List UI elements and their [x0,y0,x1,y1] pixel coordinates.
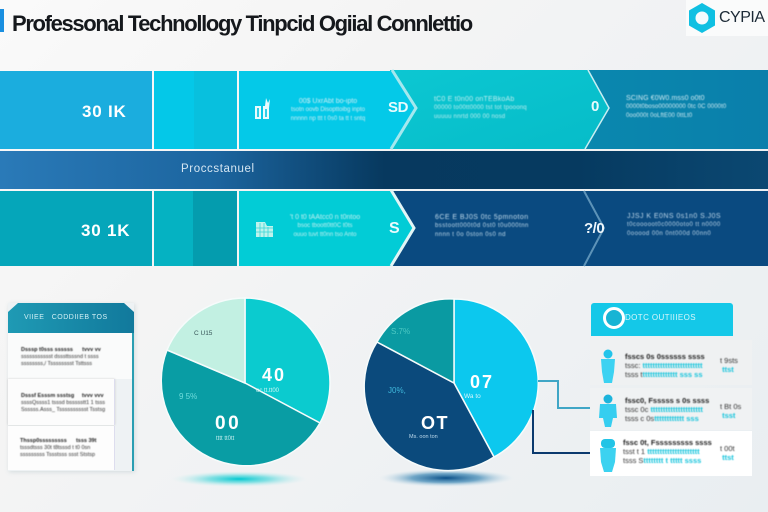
label: 07 value: 07 [470,372,494,392]
row 2 chevron 2 [390,191,768,266]
row 1 text block 2: 00000 to00tt0000 tst tot tpooonq [434,105,527,111]
row 1 text block 2: uuuuu nnrtd 000 00 nosd [434,114,505,120]
label: 07 caption: Wa to [464,393,481,400]
row 2 text: tssc 0c ttttttttttttttttttttt [625,405,703,414]
row 3 value [720,444,735,462]
label: 40 caption: oc tt.tt00 [256,388,279,394]
shadow under pie 1 [171,471,307,487]
connector: lower [533,410,591,453]
left card row 2: Ssssss.Asss_ Tsssssssssst Tsstsg [21,407,105,413]
left card row 1: ssssssssssst dsssttsssnd t ssss [21,354,99,360]
row 3 text: tsst t 1 ttttttttttttttttttttt [623,447,700,456]
row 2 text block 2 [434,213,529,238]
left card row 3: Thssp0sssssssss tsss 39t [20,438,96,444]
row 1 stat value: 30 IK [82,102,127,121]
row 2 value: tsst [722,411,735,420]
row 1 text block 1 [290,97,366,122]
row 2 text [624,396,710,423]
row 1 chevron 1 value: SD [388,99,408,116]
right header [591,303,733,336]
title accent bar [0,9,4,32]
section band [0,151,768,189]
left card row 1: Dsssp t0sss ssssss tvvv vv [21,347,101,353]
row 2 text block 3 [626,212,721,237]
row 1 text [624,352,705,379]
row 1 text block 1: tsotn oovb Disopttoibg inpto [291,107,365,113]
row 1 text block 3 [626,94,727,119]
connector: upper [538,381,591,408]
row 1 text block 1: 00$ UxrAbt bo-ipto [299,98,357,105]
pie chart 1 [161,298,330,466]
icon: hexagon logo [689,3,715,33]
panel: right people list [590,303,752,476]
icon: header ring [603,307,625,329]
label: 00 value: 00 [215,413,241,434]
row 2 text block 1: 't 0 t0 tAAtcc0 n t0ntoo [290,214,360,221]
logo wordmark: CYPIA [719,9,765,26]
row 2 chevron 2 value: ?/0 [584,220,604,237]
row 2 middle cell [154,191,237,266]
row 2 stat value: 30 1K [81,221,130,240]
row 3 text: fssc 0t, Fsssssssss ssss [623,438,712,447]
row 2 chevron 1 [239,191,413,266]
pie 1 labels [179,330,286,442]
row 2 chevron 1 value: S [389,220,400,237]
row 2 text block 2: bsstoott000t0d 0st0 t0u000tnn [435,223,529,229]
row 1 chevron 2 [390,70,609,149]
left card row 1: ssssssss,/ Tsssssssst Tsttsss [21,361,92,367]
pie 2 labels [388,327,494,440]
row 3 text: tsss Stttttttt t ttttt ssss [623,456,701,465]
shadow under pie 2 [378,469,514,487]
label: 0T value: OT [421,413,449,433]
row 1 text block 2 [434,95,527,120]
label: 00 caption: tttt tt0tt [216,436,234,442]
row 2 text block 3: t0cooooot0c0000oto0 tt n0000 [627,222,721,228]
left card row 3: sssssssss Tssstsss ssst Ststsp [20,452,95,458]
left card header: VIIEE CODDIIEB TOS [24,314,108,321]
logo [686,0,768,36]
label: 0T caption: Ms. oon ton [409,434,438,440]
row 1 value: t 9sts [720,356,738,365]
row 2 text block 3: 0ooood 00n 0nt000d 00nn0 [627,231,711,237]
row 2 text block 3: JJSJ K E0NS 0s1n0 S.J0S [627,213,721,220]
left card row 2: Dsssf Esssm ssstsg tvvv vvv [21,393,104,399]
row 3 text [622,438,712,465]
label: teal slice: S.7% [391,327,410,336]
row 1 middle cell [154,71,237,149]
row 2 text block 1: ouuo tuvt tt0nn tso Anto [293,232,357,238]
left card row 2: ssssQssss1 tsssd bssssstt1 1 tsss [21,400,105,406]
slice: teal [377,299,454,383]
left card row 3 [8,426,115,470]
left card header [8,303,134,333]
label: 40 value: 40 [262,365,286,385]
panel: left list card [8,303,134,471]
slice: light [167,298,245,383]
row 2 value [720,402,742,420]
row 3 value: ttst [722,453,734,462]
row 1 text: tssc: tttttttttttttttttttttttt [625,361,702,370]
left card row 3: tsssdtsss 30t t8tsssd t t0 0sn [20,445,90,451]
slice: 40 [245,298,330,423]
left card right edge [132,333,134,471]
slice: 00 [161,350,320,466]
row 3 value: t 00t [720,444,735,453]
band label: Proccstanuel [181,163,255,175]
icon: row 1 tools [255,98,270,119]
row 1 text block 1: nnnnn np ttt t 0s0 ta tt t sntq [291,116,365,122]
row 2 text: fssc0, Fsssss s 0s ssss [625,396,709,405]
row 2 stat cell [0,191,152,266]
row 2 text: tsss c 0stttttttttttt sss [625,414,699,423]
icon: person 3 [600,439,616,472]
row 2 text block 1 [290,213,361,238]
chevron process bands [0,69,768,266]
pie chart 2 [364,299,538,471]
slice: 07 [454,299,538,457]
row 1 text: fsscs 0s 0ssssss ssss [625,352,705,361]
row 1 chevron 2 value: 0 [591,98,599,115]
row 2 text block 2: nnnn t 0o 0ston 0s0 nd [435,232,506,238]
row 2 text block 1: bsoc tboott0tt0C t0ts [297,223,353,229]
left card row 2 [8,379,115,425]
right row 3 [590,431,752,476]
row 1 stat cell [0,71,152,149]
row 2 text block 2: 6CE E BJ0S 0tc 5pmnoton [435,214,529,221]
row 1 chevron 3 [580,70,768,149]
row 1 text: tsss ttttttttttttttt sss ss [625,370,703,379]
right row 1 [590,340,752,385]
connector lines [533,381,591,453]
label: light slice: C U15 [194,330,212,337]
row 1 text block 3: 0oo000t 0oLftE00 0ttLt0 [626,113,692,119]
label: teal slice: 9 5% [179,392,197,401]
row 2 value: t Bt 0s [720,402,741,411]
row 1 value: ttst [722,365,734,374]
row 1 text block 3: 0000t0boso00000000 0tc 0C 0000t0 [626,104,726,110]
right row 2 [590,388,752,430]
icon: person 1 [601,350,615,383]
slice: 0T [364,342,494,471]
row 1 text block 2: tC0 E t0n00 onTEBkoAb [434,96,514,103]
right header label: DOTC OUTIIIEOS [625,313,696,322]
row 1 text block 3: SCING €0W0.mss0 o0t0 [626,95,705,102]
row 1 chevron 1 [239,71,416,149]
row 1 value [720,356,738,374]
left card row 1 [8,333,133,379]
icon: row 2 building chart [256,222,273,237]
label: navy slice: J0%, [388,386,406,395]
title: Professonal Technollogy Tinpcid Ogiial Connlettio [12,11,472,36]
icon: person 2 [599,394,617,427]
